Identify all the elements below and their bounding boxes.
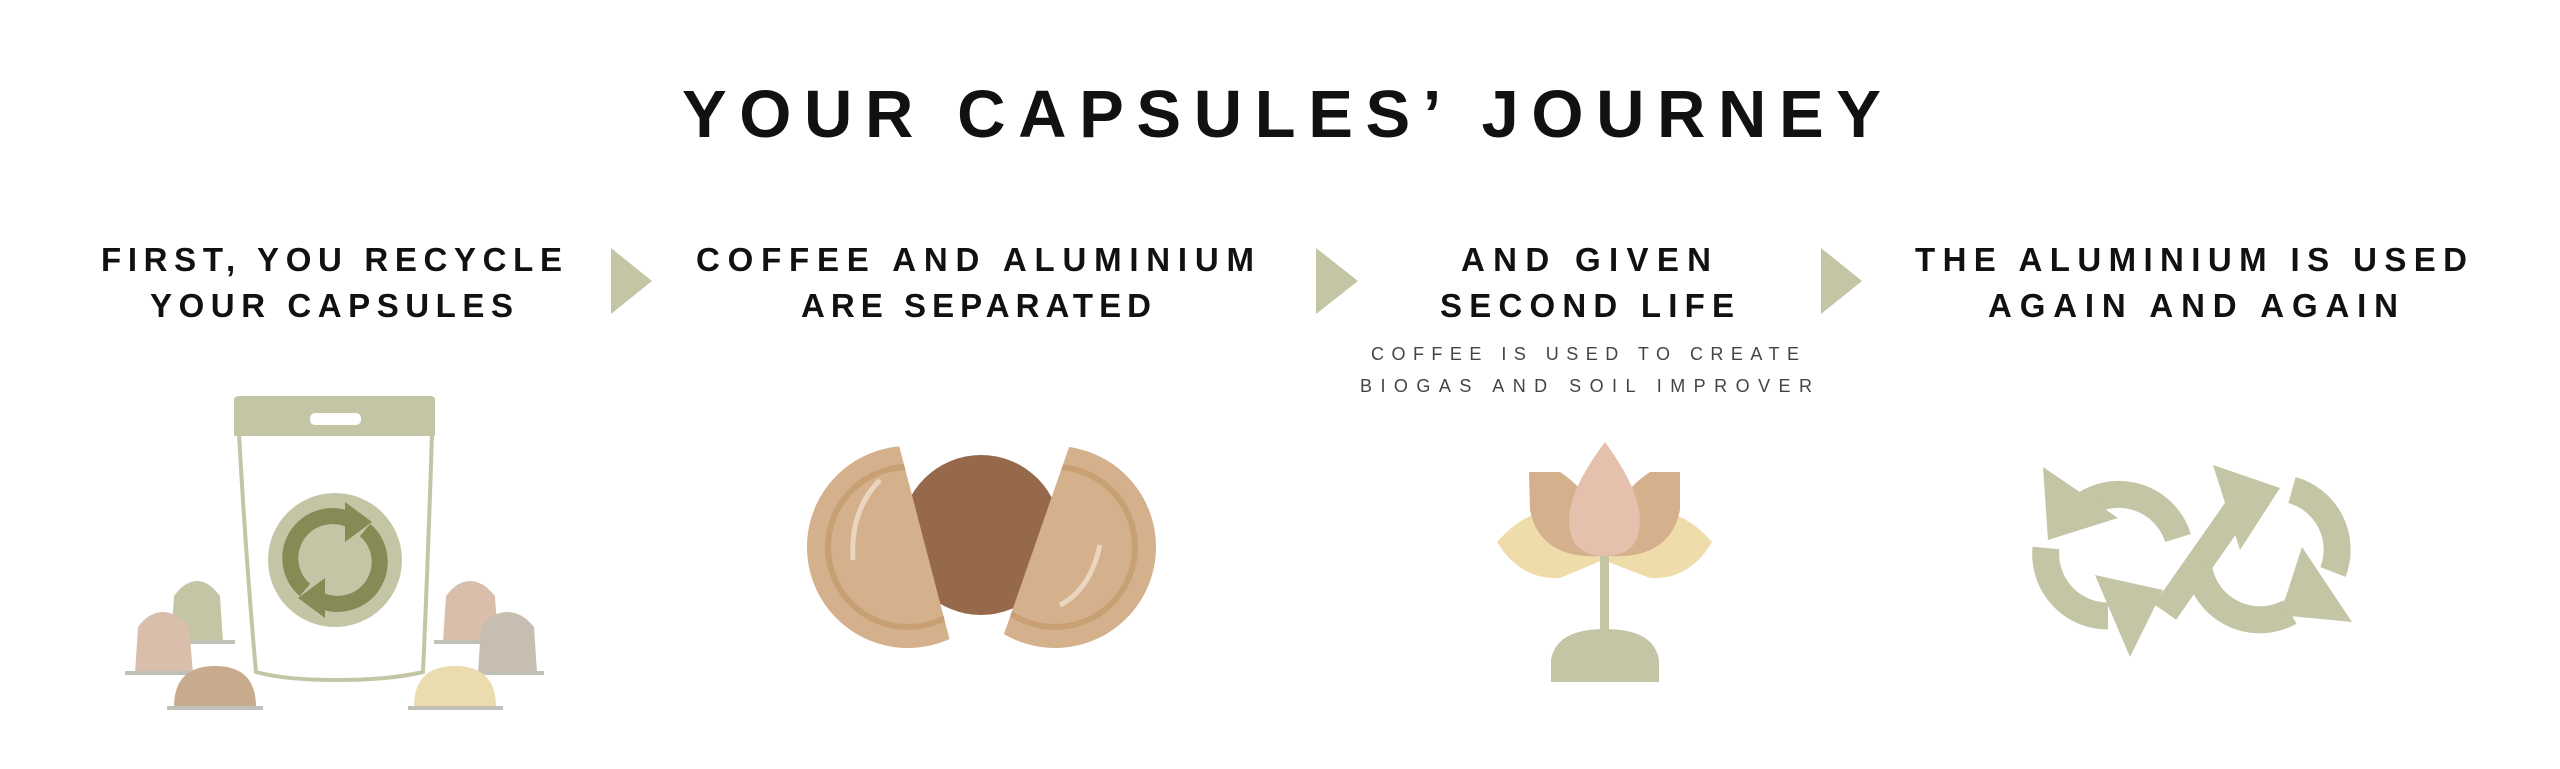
title: YOUR CAPSULES’ JOURNEY	[682, 77, 1881, 152]
subtext: step 3	[1360, 344, 1812, 396]
icon: recycling bag with capsules	[125, 396, 544, 710]
subtext: step 3: COFFEE IS USED TO CREATE	[1371, 344, 1799, 364]
heading: step 4: AGAIN AND AGAIN	[1988, 287, 2398, 324]
heading: step 4	[1915, 241, 2467, 324]
heading: step 2	[696, 241, 1254, 324]
capsules	[125, 581, 544, 710]
heading: step 2: ARE SEPARATED	[801, 287, 1151, 324]
heading: step 2: COFFEE AND ALUMINIUM	[696, 241, 1254, 278]
icon: recycle arrows on bag	[290, 502, 380, 618]
heading: step 1	[101, 241, 562, 324]
heading: step 1: YOUR CAPSULES	[150, 287, 513, 324]
arrow 1	[611, 248, 652, 314]
subtext: step 3: BIOGAS AND SOIL IMPROVER	[1360, 376, 1812, 396]
icon: infinite recycling arrows	[2043, 465, 2352, 657]
heading: step 3: SECOND LIFE	[1440, 287, 1734, 324]
icon: capsule split open	[807, 446, 1156, 648]
arrow 2	[1316, 248, 1358, 314]
heading: step 3: AND GIVEN	[1461, 241, 1711, 278]
icon: flower	[1497, 442, 1712, 682]
heading: step 1: FIRST, YOU RECYCLE	[101, 241, 562, 278]
heading: step 3	[1440, 241, 1734, 324]
arrow 3	[1821, 248, 1862, 314]
heading: step 4: THE ALUMINIUM IS USED	[1915, 241, 2467, 278]
